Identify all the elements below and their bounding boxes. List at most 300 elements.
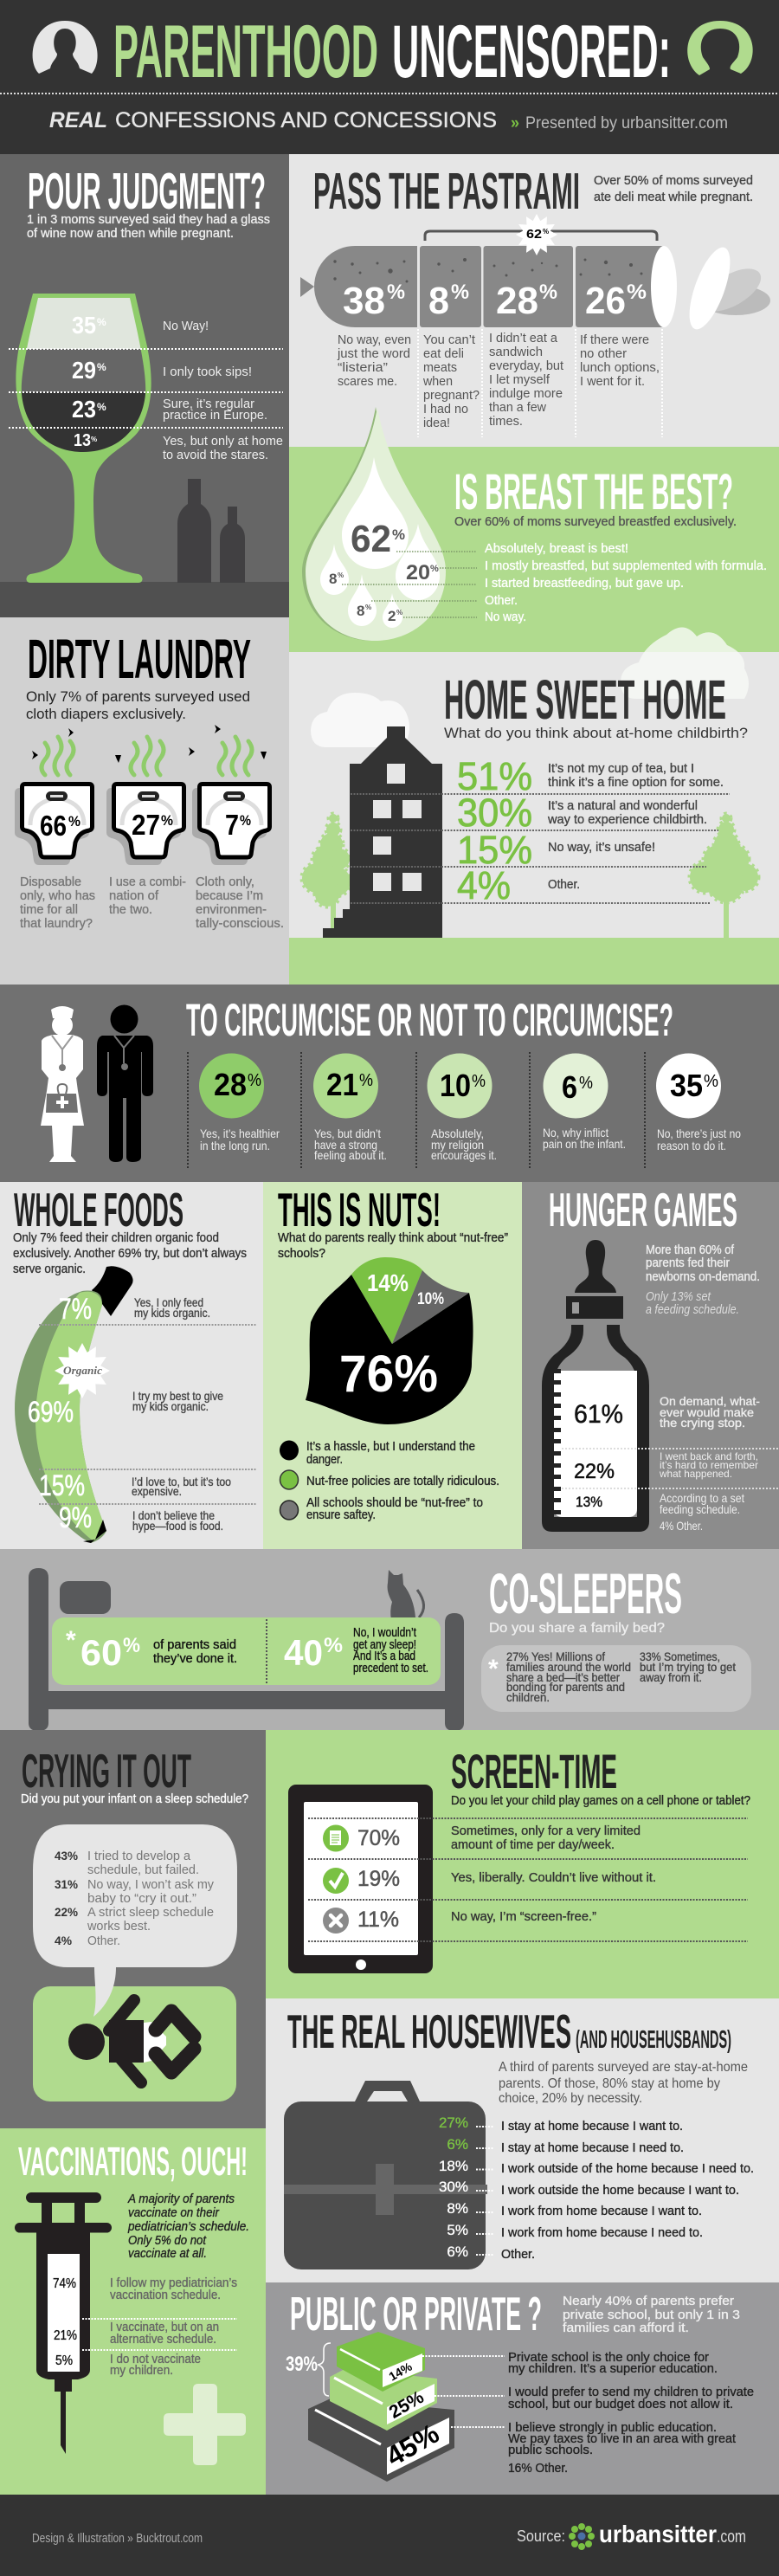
stat: 21 percent: 21: [326, 1067, 358, 1102]
panel: pass the pastrami: [289, 154, 779, 447]
panel: this is nuts: [263, 1182, 522, 1549]
syringe labels: my children.: [110, 2364, 173, 2378]
home answers: It’s a natural and wonderful: [548, 799, 698, 813]
mattress stats: *: [66, 1626, 76, 1655]
chart: banana: [15, 1266, 133, 1543]
intro text: [127, 2192, 249, 2261]
panel: real housewives: [266, 1998, 779, 2282]
callout: 62 percent burst: 62: [526, 227, 542, 242]
panel: dirty laundry: DIRTY LAUNDRY: [28, 628, 251, 690]
pastrami captions: than a few: [489, 400, 546, 415]
banana labels: Yes, I only feed: [134, 1295, 203, 1309]
column dividers: [188, 1052, 645, 1170]
speech bubble: No way, I won’t ask my: [87, 1877, 214, 1892]
book values: [381, 2359, 444, 2472]
callout: share details: but I’m trying to get: [640, 1660, 736, 1674]
briefcase values: 27%: [439, 2114, 468, 2131]
answer labels: I would prefer to send my children to private: [508, 2385, 754, 2399]
home answers: No way, it’s unsafe!: [548, 841, 655, 855]
chart: baby bottle: [542, 1240, 649, 1532]
intro text: Over 60% of moms surveyed breastfed exclusively.: [454, 514, 737, 529]
bottle labels: it’s hard to remember: [660, 1459, 758, 1471]
answer labels: Other.: [501, 2247, 535, 2262]
speech bubble: 31%: [55, 1877, 79, 1891]
legend: It’s a hassle, but I understand the: [306, 1440, 475, 1454]
home percentages: 15%: [457, 828, 532, 872]
icon: tree right: [690, 814, 758, 938]
stat: 10 percent: 10: [440, 1068, 471, 1103]
chart: pastrami: [300, 242, 770, 334]
pastrami captions: I had no: [423, 402, 468, 416]
home percentages: 30%: [457, 791, 532, 835]
pastrami captions: times.: [489, 414, 523, 429]
intro text: [27, 213, 270, 241]
callout: 62 percent burst: %: [543, 228, 549, 236]
glass values: 29: [72, 357, 96, 384]
answer list: No way.: [485, 610, 526, 624]
answer list: Absolutely, breast is best!: [485, 541, 628, 556]
legend: ensure saftey.: [306, 1508, 376, 1522]
glass labels: Yes, but only at home: [163, 434, 283, 449]
pastrami values: %: [387, 281, 405, 304]
intro text: A majority of parents: [127, 2192, 235, 2206]
answer list: [485, 541, 767, 624]
stat: 21 percent: feeling about it.: [314, 1148, 387, 1162]
speech bubble: schedule, but failed.: [87, 1863, 199, 1877]
banana values: [28, 1293, 92, 1534]
stat: 28 percent: Yes, it’s healthier: [200, 1127, 280, 1140]
pastrami values: [343, 280, 647, 322]
intro text: vaccinate at all.: [128, 2247, 207, 2261]
panel: is breast the best: [289, 407, 779, 652]
icon: briefcase: [284, 2081, 487, 2269]
drop values: %: [396, 609, 402, 617]
row dividers: [308, 1818, 748, 1941]
panel: header: [0, 0, 779, 154]
aside text: [646, 1290, 739, 1317]
diaper captions: [20, 875, 284, 931]
glass values: %: [97, 361, 106, 373]
banana values: 7%: [59, 1293, 92, 1326]
pastrami captions: I went for it.: [580, 374, 645, 389]
diaper captions: time for all: [20, 902, 78, 917]
home answers: Other.: [548, 878, 580, 892]
callout: share details: bonding for parents and: [506, 1680, 625, 1694]
callout: organic burst: [55, 1343, 110, 1398]
glass labels: Sure, it’s regular: [163, 397, 254, 411]
syringe labels: I do not vaccinate: [110, 2353, 201, 2366]
answer labels: public schools.: [508, 2443, 593, 2457]
glass values: %: [97, 316, 106, 328]
stat: 21 percent: have a strong: [314, 1138, 377, 1152]
pastrami values: %: [539, 281, 557, 304]
drop values: %: [430, 564, 439, 574]
answer labels: amount of time per day/week.: [451, 1837, 615, 1852]
banana labels: I don’t believe the: [132, 1508, 215, 1522]
intro text: parents fed their: [646, 1256, 730, 1270]
pastrami captions: scares me.: [338, 374, 397, 389]
leader lines: [422, 2356, 505, 2427]
callout: share details: families around the world: [506, 1660, 631, 1674]
speech bubble: A strict sleep schedule: [87, 1905, 214, 1920]
answer labels: I work from home because I want to.: [501, 2204, 702, 2218]
mattress stats: And It’s a bad: [353, 1650, 415, 1663]
icon: tablet: [288, 1785, 433, 1973]
row dividers: [351, 794, 730, 903]
tablet values: 70%: [357, 1826, 400, 1850]
answer labels: 16% Other.: [508, 2461, 568, 2476]
legend: Nut-free policies are totally ridiculous.: [306, 1475, 499, 1488]
glass values: %: [91, 436, 97, 443]
diaper captions: I use a combi-: [109, 875, 186, 889]
heading: SCREEN-TIME: [451, 1744, 617, 1798]
panel: public or private: [266, 2282, 779, 2495]
home answers: [547, 762, 724, 892]
drop values: [329, 518, 439, 624]
aside text: Only 13% set: [646, 1290, 711, 1304]
intro text: serve organic.: [13, 1262, 86, 1276]
icon: diaper 66: 66: [40, 810, 67, 842]
tablet values: 19%: [357, 1867, 400, 1891]
speech bubble: 22%: [55, 1905, 79, 1919]
answer labels: No way, I’m “screen-free.”: [451, 1909, 596, 1924]
callout: share details: 33% Sometimes,: [640, 1650, 720, 1663]
callout: share details: *: [488, 1655, 499, 1683]
answer labels: I believe strongly in public education.: [508, 2420, 717, 2435]
panel: screen-time: [266, 1730, 779, 1998]
speech bubble: 43%: [55, 1849, 79, 1863]
speech bubble: 4%: [55, 1934, 73, 1947]
stat: 6 percent: 6: [562, 1069, 577, 1105]
icon: cat: [388, 1570, 424, 1620]
panel: pour judgment: POUR JUDGMENT?: [28, 163, 266, 220]
bottle values: 13%: [576, 1494, 602, 1510]
stat: 10 percent: my religion: [431, 1138, 484, 1152]
intro text: [499, 2060, 748, 2106]
callout: share details: share a bed—it’s better: [506, 1670, 620, 1684]
intro text: Over 50% of moms surveyed: [594, 174, 753, 188]
intro text: cloth diapers exclusively.: [26, 706, 186, 722]
icon: bottles: [177, 479, 245, 583]
drop values: %: [392, 526, 405, 543]
pastrami captions: You can’t: [423, 332, 476, 347]
panel: whole foods: WHOLE FOODS: [14, 1183, 183, 1236]
diaper captions: environmen-: [196, 902, 267, 917]
panel: crying it out: [0, 1730, 266, 2128]
syringe labels: [110, 2276, 237, 2378]
stat: 28 percent: %: [248, 1071, 261, 1090]
icon: baby: [68, 2000, 194, 2082]
briefcase values: 30%: [439, 2179, 468, 2195]
bottle labels: [659, 1394, 760, 1533]
pastrami captions: pregnant?: [423, 388, 480, 403]
banana values: 15%: [39, 1469, 85, 1502]
icon: diaper 66: %: [68, 813, 80, 830]
bracket: 39 percent: 39%: [286, 2353, 318, 2376]
syringe values: 74%: [53, 2276, 76, 2291]
mattress stats: 40: [284, 1632, 323, 1673]
icon: bed: [29, 1568, 464, 1731]
briefcase values: 6%: [447, 2244, 468, 2260]
answer labels: I stay at home because I want to.: [501, 2119, 683, 2134]
drop values: 20: [406, 561, 430, 584]
syringe labels: vaccination schedule.: [110, 2289, 221, 2302]
syringe values: 5%: [55, 2353, 73, 2368]
pastrami dividers: [418, 329, 662, 437]
home percentages: 4%: [457, 863, 511, 907]
answer labels: [508, 2350, 754, 2476]
intro text: [13, 1231, 247, 1276]
drop values: %: [338, 571, 344, 579]
legend: All schools should be “nut-free” to: [306, 1496, 483, 1510]
glass labels: [163, 319, 283, 462]
icon: diaper 7: %: [240, 812, 251, 829]
legend: danger.: [306, 1453, 343, 1467]
answer list: Other.: [485, 593, 518, 608]
glass labels: practice in Europe.: [163, 408, 267, 423]
pastrami captions: I let myself: [489, 372, 550, 387]
pastrami captions: sandwich: [489, 345, 543, 359]
drop values: 8: [357, 603, 364, 619]
stat: 10 percent: Absolutely,: [431, 1127, 484, 1140]
stat: 35 percent: No, there’s just no: [657, 1127, 741, 1140]
stat: 28 percent: in the long run.: [200, 1139, 270, 1152]
icon: diaper 7: [192, 784, 270, 865]
intro text: choice, 20% by necessity.: [499, 2091, 642, 2106]
stat: 6 percent: %: [579, 1074, 593, 1093]
stat: 10 percent: encourages it.: [431, 1148, 497, 1162]
banana labels: hype—food is food.: [132, 1519, 223, 1533]
icon: urbansitter logo: [569, 2523, 595, 2550]
intro text: [278, 1231, 508, 1261]
pie values: 10%: [417, 1290, 444, 1308]
banana values: 69%: [28, 1396, 74, 1429]
intro text: vaccinate on their: [128, 2206, 220, 2220]
icon: nurse: [41, 1006, 84, 1162]
stat: 28 percent: [199, 1053, 280, 1152]
home answers: It’s not my cup of tea, but I: [548, 762, 694, 776]
bottle values: 61%: [574, 1400, 623, 1429]
syringe labels: I follow my pediatrician’s: [110, 2276, 237, 2290]
mattress stats: they’ve done it.: [153, 1652, 237, 1666]
answer labels: [501, 2119, 754, 2262]
leader lines: [342, 552, 477, 617]
subtitle: Presented by urbansitter.com: [525, 114, 728, 132]
pastrami captions: eat deli: [423, 346, 464, 361]
pastrami captions: when: [422, 374, 453, 389]
intro text: exclusively. Another 69% try, but don’t always: [13, 1247, 247, 1261]
callout: 62 percent burst: [516, 214, 557, 255]
diaper captions: only, who has: [20, 888, 95, 903]
icon: cross: [323, 1908, 349, 1934]
answer list: I mostly breastfed, but supplemented with formula.: [485, 558, 767, 573]
callout: share details: [481, 1645, 751, 1712]
banana values: 9%: [59, 1501, 92, 1534]
stat: 21 percent: Yes, but didn’t: [314, 1127, 381, 1140]
question: Did you put your infant on a sleep schedule?: [21, 1792, 248, 1806]
home percentages: [457, 754, 532, 907]
diaper captions: nation of: [109, 888, 159, 903]
pastrami captions: If there were: [580, 332, 649, 347]
heading: VACCINATIONS, OUCH!: [18, 2139, 248, 2184]
intro text: parents. Of those, 80% stay at home by: [499, 2076, 720, 2091]
speech bubble: [33, 1824, 237, 2017]
briefcase values: [439, 2114, 468, 2260]
pastrami values: %: [451, 281, 469, 304]
drop values: 2: [388, 608, 396, 624]
stat: 35 percent: [656, 1053, 741, 1152]
pastrami captions: No way, even: [338, 332, 411, 347]
answer list: I started breastfeeding, but gave up.: [485, 576, 684, 591]
pastrami captions: no other: [580, 346, 627, 361]
stat: 35 percent: 35: [670, 1068, 703, 1103]
icon: diaper 27: [106, 784, 183, 865]
glass values: 13: [74, 431, 91, 450]
stat: 21 percent: [313, 1053, 387, 1162]
logo wordmark: .com: [717, 2528, 746, 2547]
pastrami captions: just the word: [337, 346, 410, 361]
intro text: More than 60% of: [646, 1243, 735, 1257]
aside text: a feeding schedule.: [646, 1303, 739, 1317]
bottle values: [574, 1400, 623, 1510]
intro text: [646, 1243, 760, 1284]
mattress stats: of parents said: [153, 1638, 236, 1652]
baby card: [33, 1986, 236, 2101]
diaper captions: that laundry?: [20, 916, 93, 931]
panel: dirty laundry: [0, 617, 289, 985]
panel: pour judgment: [0, 154, 289, 617]
answer labels: We pay taxes to live in an area with great: [508, 2431, 737, 2446]
pastrami values: 26: [585, 280, 626, 322]
pie values: [339, 1269, 444, 1403]
diaper captions: because I’m: [196, 888, 263, 903]
icon: house: [323, 726, 442, 938]
panel: co-sleepers: [0, 1549, 779, 1731]
icon: check: [323, 1868, 349, 1894]
bottle values: 22%: [574, 1460, 615, 1483]
source: Source:: [517, 2528, 565, 2545]
mattress stats: precedent to set.: [353, 1662, 428, 1675]
answer labels: my children. It’s a superior education.: [508, 2361, 718, 2376]
answer labels: Yes, liberally. Couldn’t live without it.: [451, 1870, 656, 1885]
speech bubble: Other.: [87, 1934, 120, 1948]
diaper captions: the two.: [109, 902, 152, 917]
answer labels: I stay at home because I need to.: [501, 2140, 684, 2155]
chart: syringe: [15, 2192, 112, 2454]
pastrami values: %: [627, 281, 647, 304]
mattress stats: 60: [80, 1632, 122, 1673]
chart: milk drops: [302, 407, 446, 641]
glass values: [72, 312, 106, 450]
diaper captions: Disposable: [20, 875, 81, 889]
stat: 35 percent: reason to do it.: [657, 1139, 726, 1152]
icon: cloud right: [621, 627, 749, 699]
pastrami captions: “listeria”: [338, 360, 388, 375]
panel: footer: [0, 2495, 779, 2576]
answer labels: [451, 1824, 656, 1924]
answer labels: Private school is the only choice for: [508, 2350, 709, 2365]
pie values: 76%: [339, 1345, 438, 1403]
mattress stats: No, I wouldn’t: [353, 1626, 416, 1640]
row dividers: [562, 1449, 779, 1488]
bottle labels: On demand, what-: [660, 1394, 760, 1408]
bottle labels: what happened.: [659, 1468, 732, 1480]
bottle labels: ever would make: [660, 1405, 754, 1419]
tablet values: [357, 1826, 400, 1932]
stat: 10 percent: [428, 1053, 497, 1162]
bottle labels: I went back and forth,: [660, 1450, 758, 1462]
intro text: What do parents really think about “nut-free”: [278, 1231, 508, 1245]
intro text: A third of parents surveyed are stay-at-home: [499, 2060, 748, 2075]
diaper captions: Cloth only,: [196, 875, 254, 889]
intro text: 1 in 3 moms surveyed said they had a glass: [27, 213, 270, 227]
callout: share details: children.: [506, 1690, 550, 1704]
stat: 28 percent: 28: [214, 1067, 247, 1102]
stat: 6 percent: No, why inflict: [543, 1126, 608, 1140]
icon: tree left: [302, 814, 351, 938]
home percentages: 51%: [457, 754, 532, 798]
question: Do you share a family bed?: [489, 1621, 665, 1636]
intro text: private school, but only 1 in 3: [563, 2308, 740, 2322]
row dividers: [82, 2319, 237, 2350]
intro text: [594, 174, 753, 204]
drop values: 8: [329, 571, 337, 587]
answer labels: school, but our budget does not allow it.: [508, 2397, 733, 2411]
icon: doctor: [97, 1004, 153, 1162]
logo wordmark: urbansitter: [599, 2521, 717, 2547]
subtitle: [49, 108, 728, 132]
intro text: families can afford it.: [563, 2321, 689, 2335]
chart: nut pie: [306, 1257, 473, 1424]
pastrami values: 38: [343, 280, 385, 322]
pastrami values: 28: [496, 280, 538, 322]
pie values: 14%: [367, 1269, 409, 1296]
icon: father silhouette: [33, 21, 98, 74]
speech bubble: baby to “cry it out.”: [87, 1891, 196, 1906]
home answers: way to experience childbirth.: [547, 813, 707, 827]
icon: mother silhouette: [687, 21, 753, 75]
home answers: think it’s a fine option for some.: [548, 776, 724, 790]
intro text: ate deli meat while pregnant.: [594, 190, 753, 204]
panel: whole foods: [0, 1182, 263, 1549]
drop values: %: [365, 604, 371, 611]
panel: home sweet home: [289, 627, 779, 985]
pastrami captions: [337, 331, 660, 430]
icon: cloud left: [311, 693, 409, 747]
pastrami captions: everyday, but: [489, 358, 564, 373]
diaper captions: tally-conscious.: [196, 916, 284, 931]
callout: organic burst: Organic: [63, 1364, 102, 1377]
banana labels: [132, 1295, 231, 1533]
banana labels: my kids organic.: [132, 1399, 209, 1413]
icon: diaper 7: 7: [225, 809, 239, 841]
intro text: of wine now and then while pregnant.: [27, 227, 234, 241]
briefcase values: 5%: [447, 2222, 468, 2238]
mattress stats: %: [324, 1634, 343, 1657]
drop values: 62: [351, 518, 391, 560]
leader dots: [476, 2127, 493, 2255]
banana labels: I try my best to give: [132, 1389, 223, 1403]
glass values: %: [97, 401, 106, 413]
subtitle: CONFESSIONS AND CONCESSIONS: [115, 108, 497, 132]
glass labels: No Way!: [163, 319, 209, 333]
intro text: schools?: [278, 1247, 325, 1261]
credit: Design & Illustration » Bucktrout.com: [32, 2531, 203, 2546]
intro text: Only 5% do not: [128, 2234, 207, 2248]
speech bubble: works best.: [87, 1919, 151, 1934]
briefcase values: 6%: [447, 2136, 468, 2153]
icon: cross: [164, 2384, 246, 2465]
